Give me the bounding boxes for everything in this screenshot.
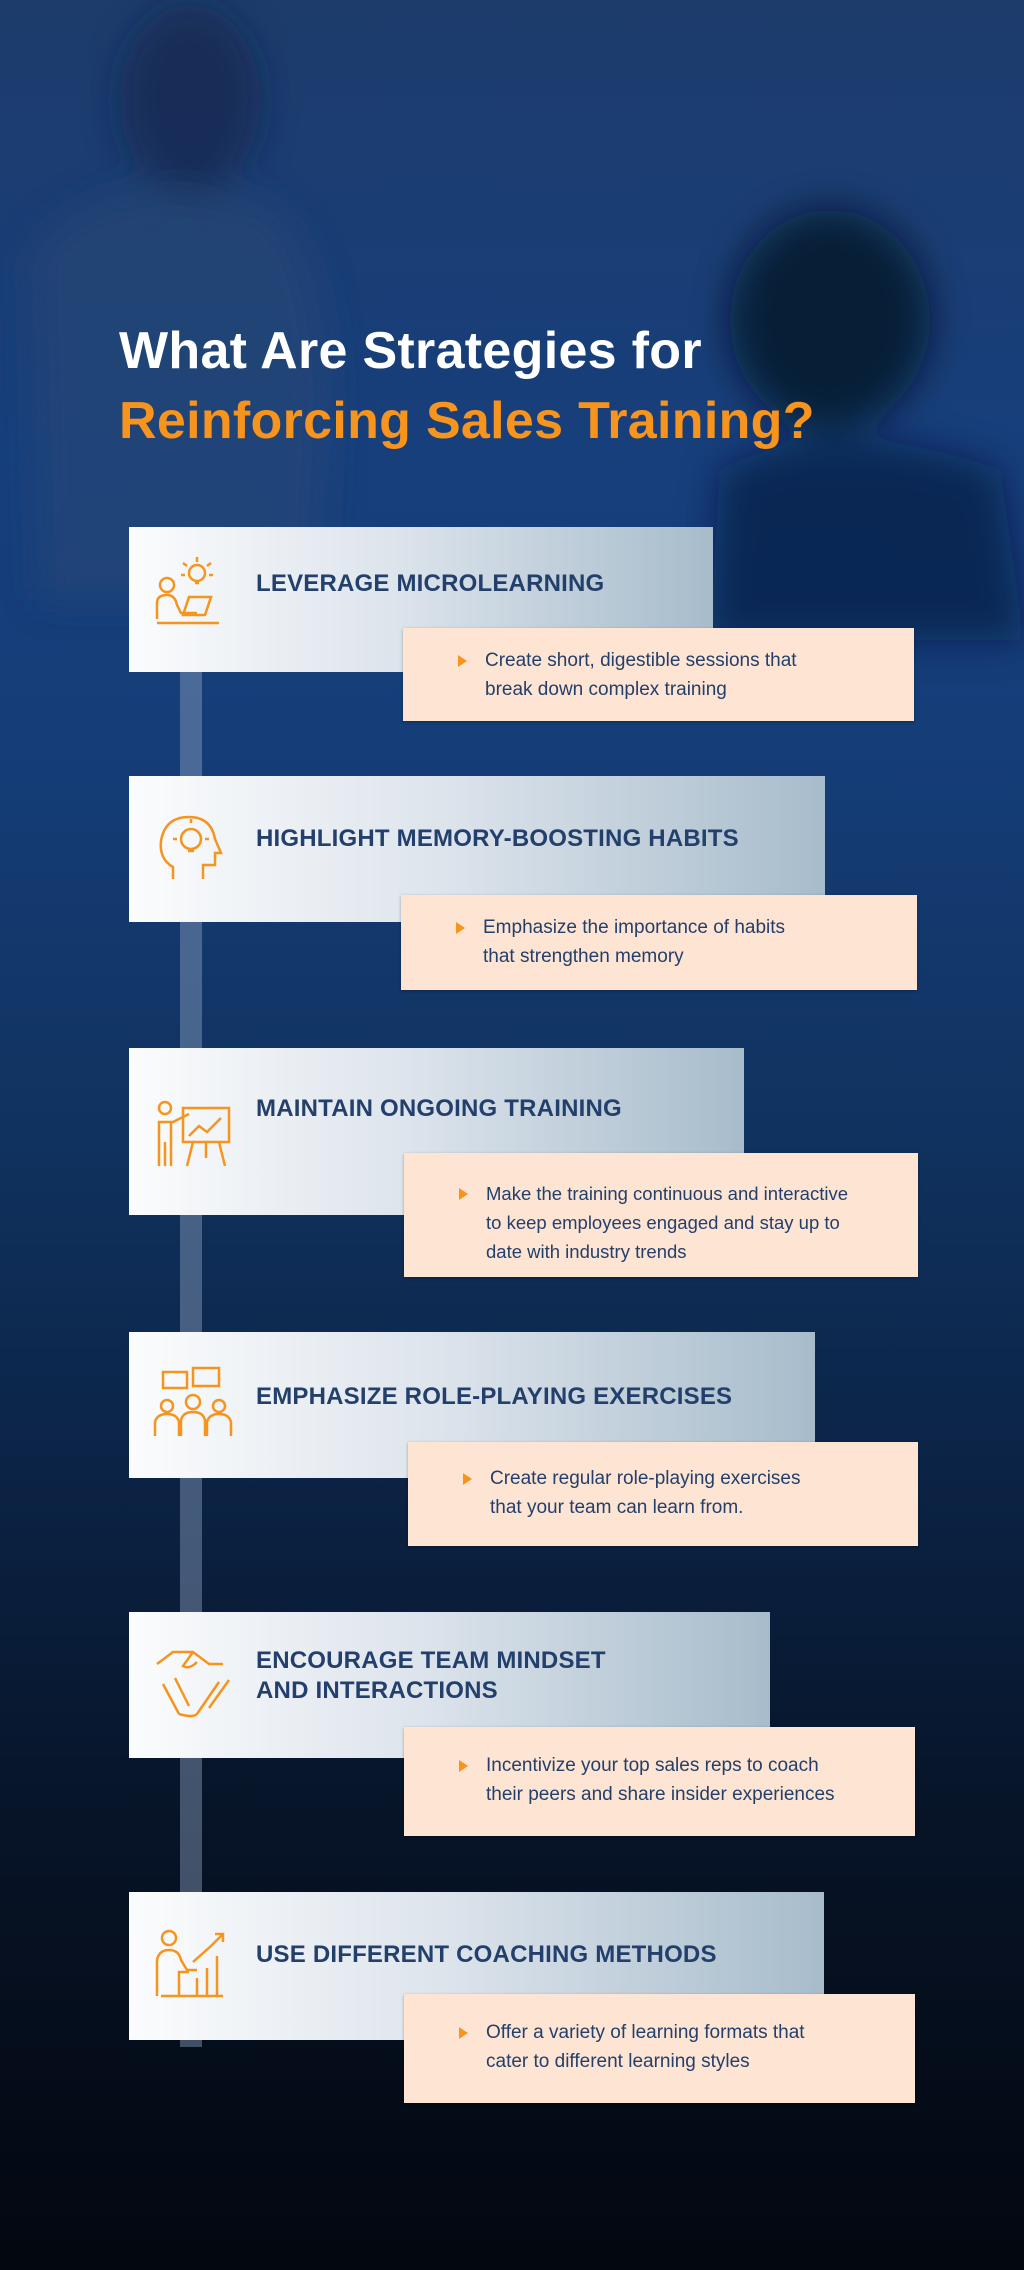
icon: head with bulb — [160, 816, 223, 879]
callout 4 — [408, 1442, 918, 1546]
background photo silhouettes — [48, 0, 1024, 654]
heading — [256, 1647, 606, 1704]
heading: LEVERAGE MICROLEARNING — [256, 570, 604, 597]
heading: ENCOURAGE TEAM MINDSET — [256, 1647, 606, 1674]
icon: group chat — [154, 1366, 232, 1436]
timeline line — [180, 672, 202, 2047]
panel: card 2 — [129, 776, 825, 922]
callout 5: Incentivize your top sales reps to coach — [486, 1755, 819, 1776]
heading: HIGHLIGHT MEMORY-BOOSTING HABITS — [256, 825, 739, 852]
callout 3: date with industry trends — [486, 1241, 687, 1262]
panel: card 6 — [129, 1892, 824, 2040]
callout 6: Offer a variety of learning formats that — [486, 2022, 805, 2043]
callout 4: Create regular role-playing exercises — [490, 1468, 800, 1489]
title — [119, 322, 815, 450]
callout 5 — [404, 1727, 915, 1836]
panel: card 3 — [129, 1048, 744, 1215]
icon: presenter board — [158, 1100, 230, 1166]
panel: card 5 — [129, 1612, 770, 1758]
heading: MAINTAIN ONGOING TRAINING — [256, 1095, 622, 1122]
callout 1: Create short, digestible sessions that — [485, 650, 797, 671]
callout 2: that strengthen memory — [483, 946, 684, 967]
callout 3 — [404, 1153, 918, 1277]
icon: person laptop idea — [156, 557, 219, 624]
callout 3: Make the training continuous and interactive — [486, 1183, 848, 1204]
callout 4: that your team can learn from. — [490, 1497, 743, 1518]
panel: card 1 — [129, 527, 713, 672]
icon: person chart — [156, 1930, 224, 1998]
callout 3: to keep employees engaged and stay up to — [486, 1212, 840, 1233]
panel: card 4 — [129, 1332, 815, 1478]
title: Reinforcing Sales Training? — [119, 392, 815, 450]
callout 2: Emphasize the importance of habits — [483, 917, 785, 938]
callout 1 — [403, 628, 914, 721]
callout 1: break down complex training — [485, 679, 727, 700]
heading: AND INTERACTIONS — [256, 1677, 498, 1704]
title: What Are Strategies for — [119, 322, 702, 380]
callout 2 — [401, 895, 917, 990]
icon: handshake — [156, 1650, 230, 1718]
heading: USE DIFFERENT COACHING METHODS — [256, 1941, 717, 1968]
callout 6 — [404, 1994, 915, 2103]
heading: EMPHASIZE ROLE-PLAYING EXERCISES — [256, 1383, 732, 1410]
callout 5: their peers and share insider experiences — [486, 1784, 835, 1805]
callout 6: cater to different learning styles — [486, 2051, 750, 2072]
